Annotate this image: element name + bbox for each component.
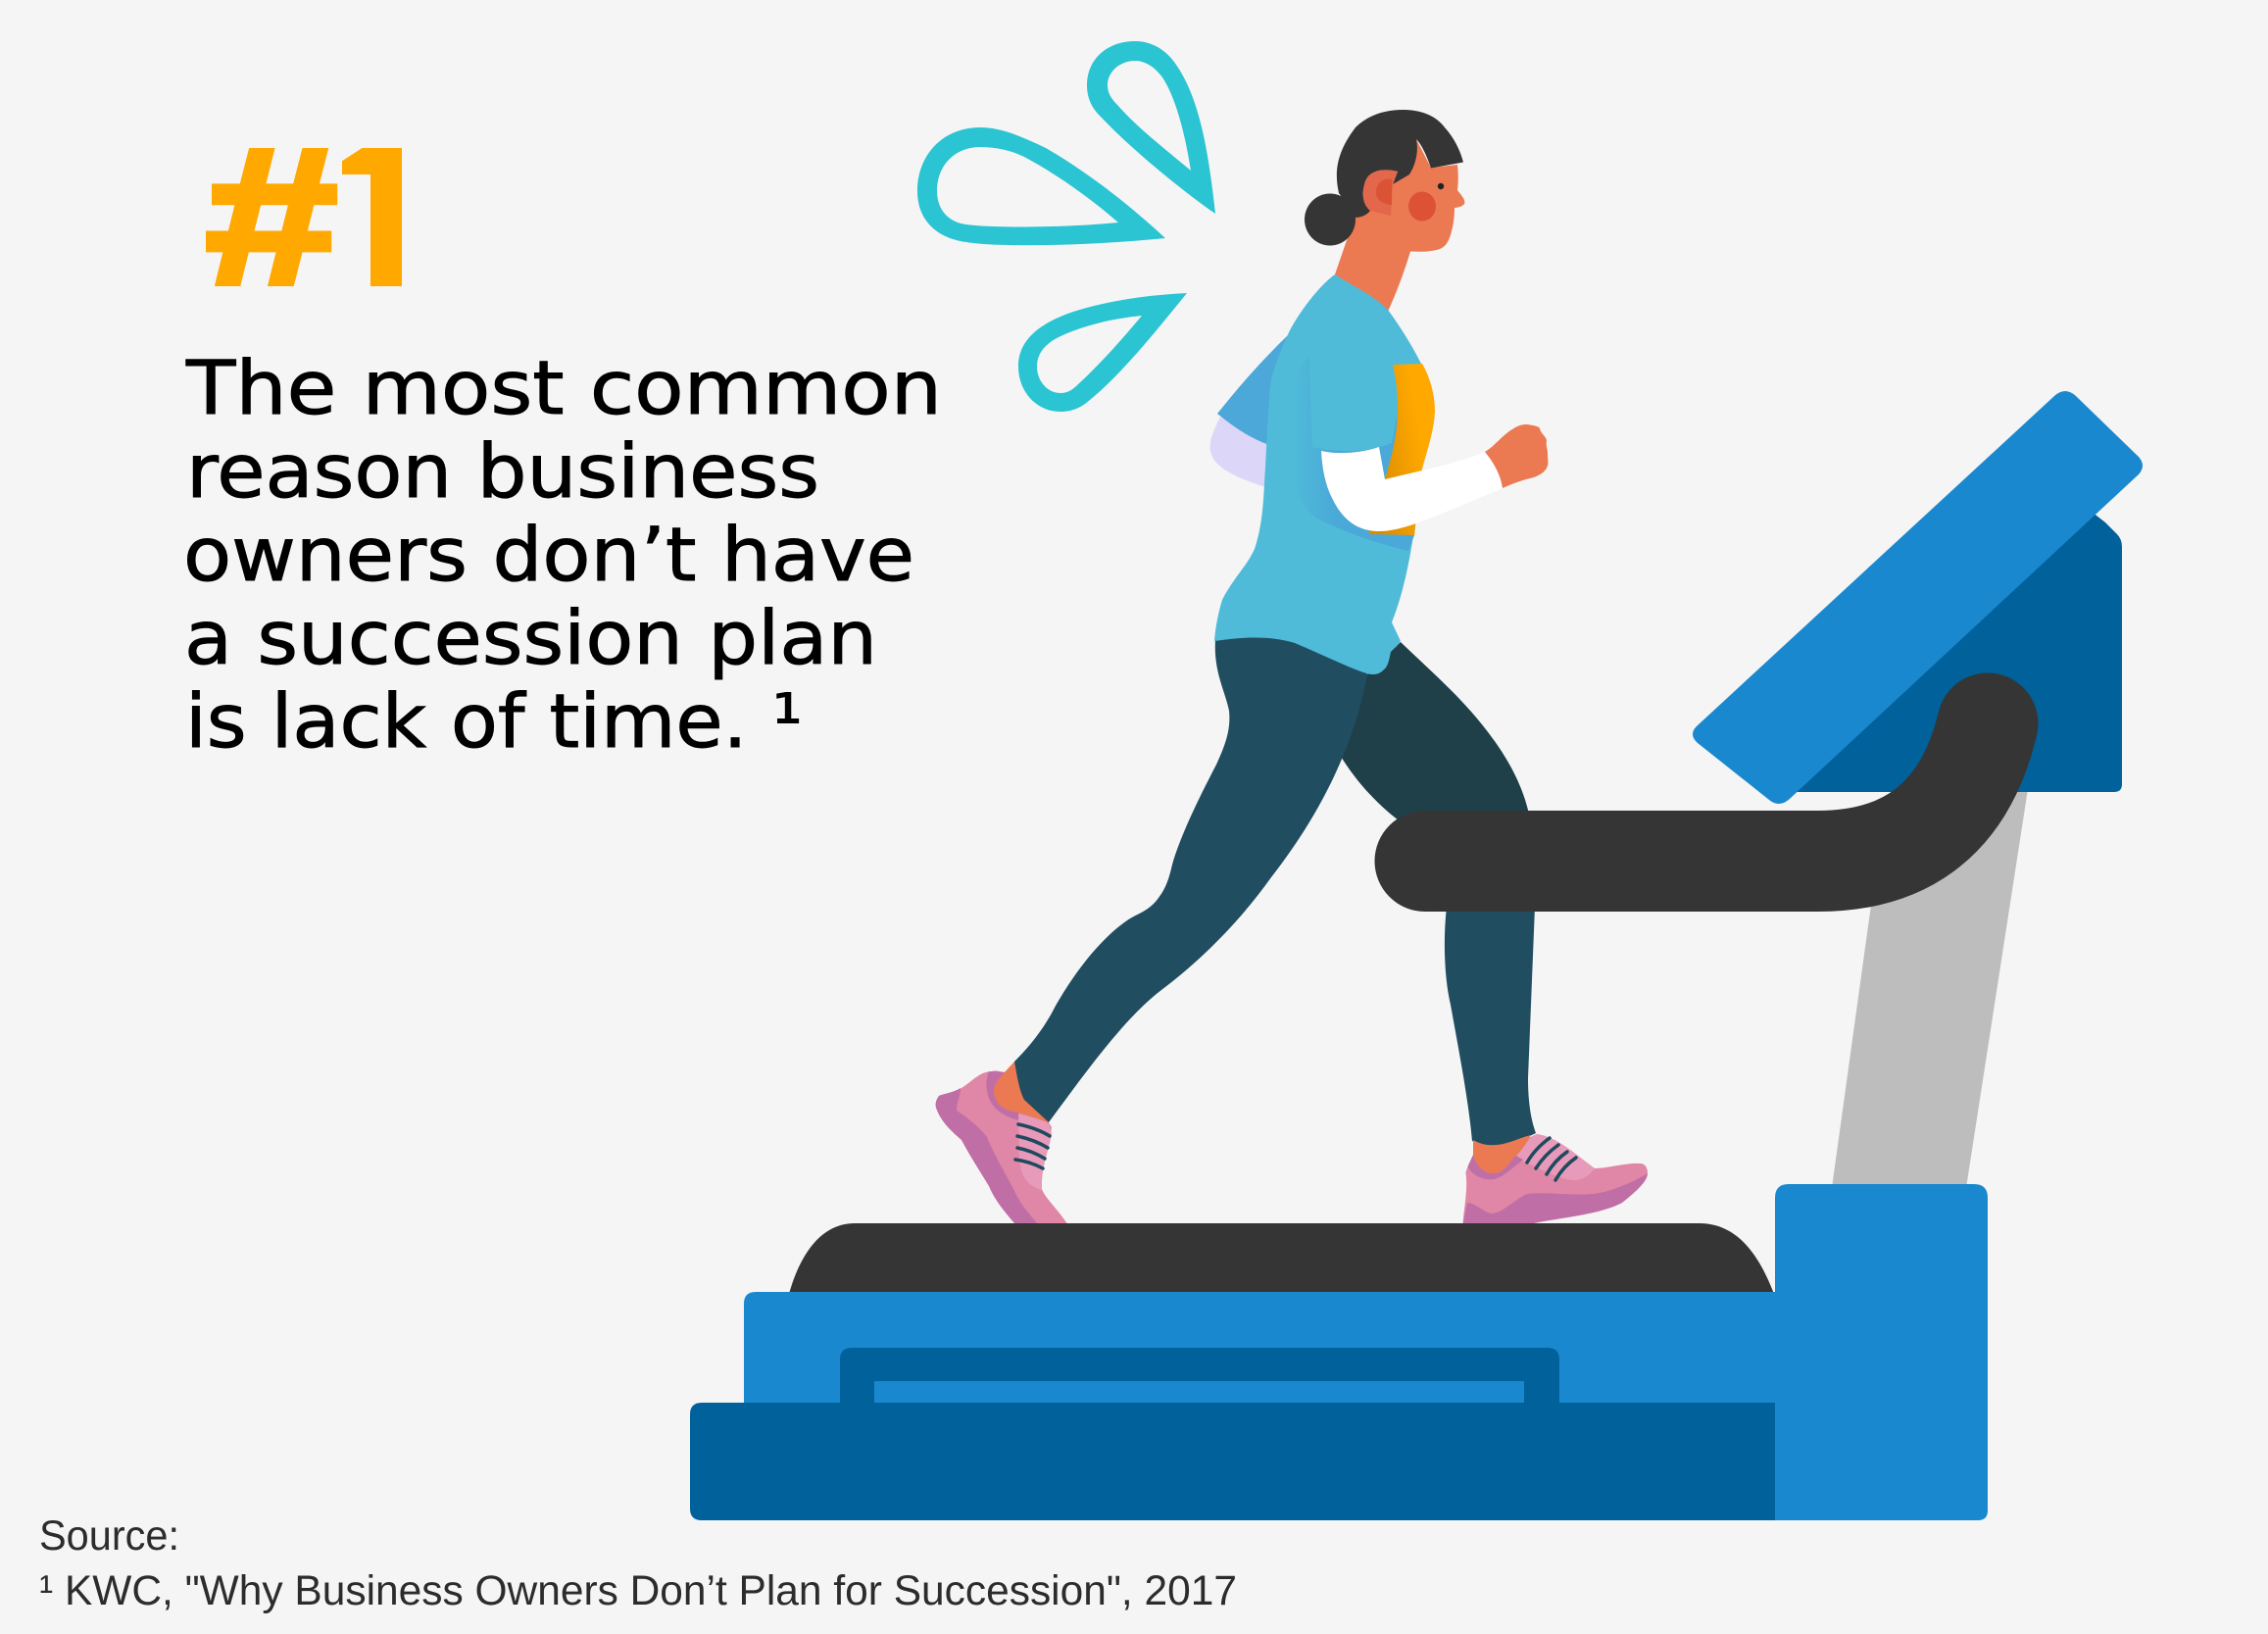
heading: #1: 1: [326, 105, 438, 329]
treadmill upper deck: [744, 1292, 1779, 1404]
runner: near leg: [1014, 627, 1367, 1122]
runner: front arm: [1321, 447, 1503, 531]
runner: hair bun: [1305, 194, 1356, 245]
treadmill tower: [1775, 1184, 1988, 1520]
treadmill slot: [840, 1348, 1559, 1411]
runner: shirt: [1214, 274, 1435, 674]
runner: far lower leg: [1445, 907, 1536, 1145]
text block: main statement: owners don’t have: [183, 511, 914, 598]
icon: sweat drops: [917, 41, 1215, 412]
treadmill stand pole: [1832, 789, 2028, 1188]
runner: neck and face: [1335, 139, 1464, 312]
runner: cheek: [1408, 192, 1436, 222]
runner: far leg thigh: [1340, 642, 1531, 823]
heading: #1: #: [206, 105, 337, 329]
text block: main statement: a succession plan: [184, 594, 877, 681]
runner: hand: [1485, 424, 1548, 488]
runner: eye: [1438, 183, 1444, 189]
runner: book under arm: [1368, 364, 1435, 535]
treadmill console: [1693, 391, 2143, 804]
text block: main statement: The most common: [185, 344, 942, 431]
source text: Source:: [39, 1512, 179, 1560]
source text: [39, 1512, 1237, 1614]
treadmill base: [690, 1184, 1988, 1520]
runner: back arm sleeve and lavender arm: [1210, 334, 1289, 487]
treadmill lower base: [690, 1403, 1775, 1520]
runner: shirt shadow: [1294, 357, 1421, 551]
text block: main statement: is lack of time. ¹: [185, 677, 803, 765]
text block: main statement: [183, 344, 942, 765]
source text: ¹ KWC, "Why Business Owners Don’t Plan for Succession", 2017: [39, 1567, 1237, 1614]
runner: hair: [1337, 110, 1463, 218]
treadmill handle: [1425, 723, 1988, 861]
text block: main statement: reason business: [186, 427, 819, 515]
treadmill belt: [789, 1223, 1774, 1294]
right shoe: [1462, 1134, 1648, 1225]
heading: #1: [206, 148, 402, 286]
left shoe: [936, 1062, 1068, 1225]
runner: ear: [1363, 170, 1398, 216]
